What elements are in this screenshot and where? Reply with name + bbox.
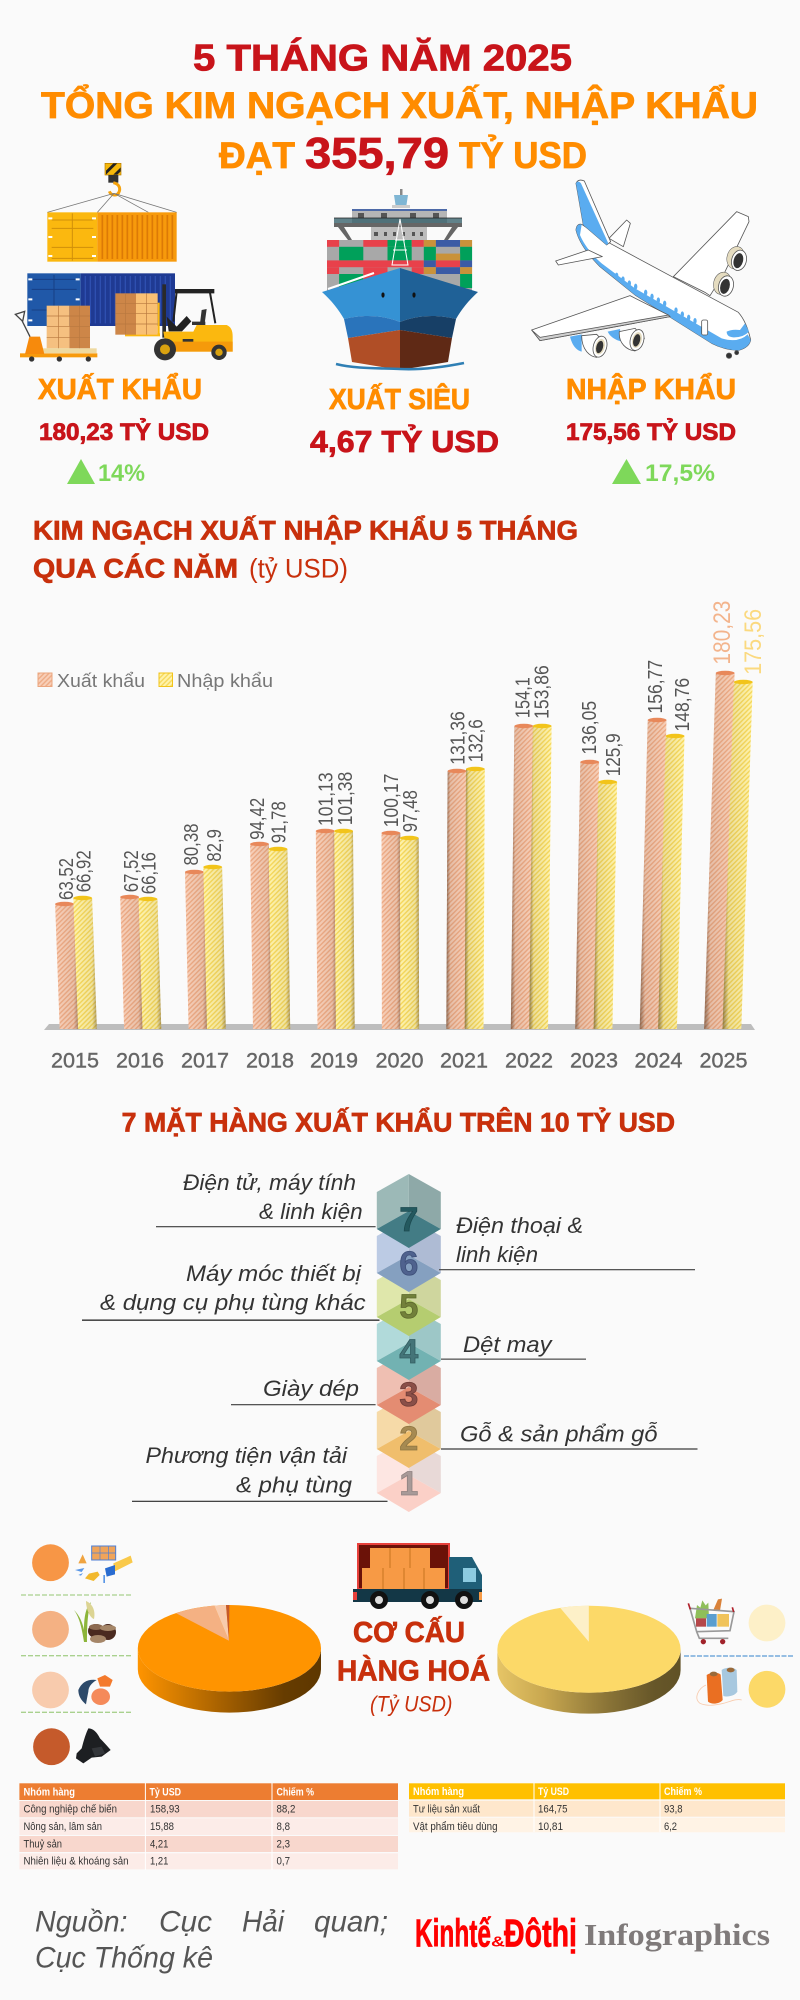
icon: crane, containers and forklift xyxy=(15,163,233,362)
hexagon 7 xyxy=(377,1174,441,1248)
bars 2016: 67,52 xyxy=(121,850,143,892)
bars 2021 xyxy=(440,711,488,1072)
chart legend xyxy=(38,671,273,691)
label: phương tiện: Phương tiện vận tải xyxy=(146,1443,348,1468)
table: export: 88,2 xyxy=(276,1804,295,1816)
bars 2016: 66,16 xyxy=(139,852,161,894)
hexagon stack xyxy=(377,1174,441,1512)
bars 2022: 2022 xyxy=(505,1048,553,1072)
bars 2021: 131,36 xyxy=(447,711,469,765)
bars 2021: 2021 xyxy=(440,1048,488,1072)
stat: xuất khẩu: 14% xyxy=(98,460,145,487)
stat: nhập khẩu xyxy=(566,372,736,487)
bars 2018 xyxy=(246,798,294,1072)
bars 2020: 97,48 xyxy=(400,790,422,832)
bars 2020: 2020 xyxy=(376,1048,424,1072)
heading: goods structure: HÀNG HOÁ xyxy=(337,1654,490,1688)
source note: Cục xyxy=(159,1906,212,1939)
stat: xuất siêu: XUẤT SIÊU xyxy=(329,382,470,416)
bars 2016: 2016 xyxy=(116,1048,164,1072)
label: dệt may: Dệt may xyxy=(463,1332,554,1357)
bars 2022 xyxy=(505,665,554,1072)
bars 2024: 2024 xyxy=(634,1048,683,1072)
table: export: Chiếm % xyxy=(276,1786,314,1798)
stat: nhập khẩu: 17,5% xyxy=(645,460,715,487)
hexagon 2: 2 xyxy=(399,1420,418,1458)
logo: Infographics xyxy=(584,1917,770,1952)
title: ĐẠT xyxy=(219,135,295,176)
bars 2015: 63,52 xyxy=(56,858,78,900)
table: import: Vật phẩm tiêu dùng xyxy=(413,1821,498,1833)
stat: xuất siêu xyxy=(310,382,499,459)
stat: nhập khẩu: 175,56 TỶ USD xyxy=(566,417,736,446)
label: phương tiện: & phụ tùng xyxy=(236,1473,353,1498)
logo xyxy=(415,1913,770,1956)
bars 2017 xyxy=(181,824,229,1072)
table: import xyxy=(409,1783,785,1833)
table: export: Nông sản, lâm sản xyxy=(24,1821,102,1833)
label: gỗ: Gỗ & sản phẩm gỗ xyxy=(460,1422,658,1447)
table: import: Tỷ USD xyxy=(538,1786,569,1798)
chart legend: Xuất khẩu xyxy=(57,671,145,691)
title: TỶ USD xyxy=(459,135,587,176)
label: điện tử: & linh kiện xyxy=(259,1199,363,1224)
bars 2022: 153,86 xyxy=(532,665,554,719)
bars 2025: 180,23 xyxy=(709,601,736,665)
bars 2020: 100,17 xyxy=(381,774,403,827)
table: export: Thuỷ sản xyxy=(24,1838,62,1850)
pie chart: export xyxy=(138,1605,321,1713)
bars 2019 xyxy=(310,772,358,1072)
bars 2015: 66,92 xyxy=(73,850,95,892)
stat: xuất siêu: 4,67 TỶ USD xyxy=(310,424,499,459)
label: máy móc xyxy=(82,1261,380,1321)
icon: agriculture and forestry xyxy=(74,1601,116,1643)
hexagon 7: 7 xyxy=(399,1201,418,1239)
table: export: 8,8 xyxy=(276,1821,290,1833)
bars 2023 xyxy=(570,701,625,1072)
bars 2024 xyxy=(634,660,694,1072)
icon: container ship xyxy=(322,189,478,370)
bars 2019: 2019 xyxy=(310,1048,358,1072)
table: export: Tỷ USD xyxy=(150,1786,181,1798)
table: export: Nhóm hàng xyxy=(24,1786,75,1798)
label: điện thoại: linh kiện xyxy=(456,1242,538,1267)
source note: Nguồn: xyxy=(35,1906,128,1939)
title: TỔNG KIM NGẠCH XUẤT, NHẬP KHẨU xyxy=(41,83,758,126)
bars 2021: 132,6 xyxy=(466,719,488,762)
label: phương tiện xyxy=(132,1443,388,1502)
heading: goods structure: (Tỷ USD) xyxy=(370,1692,452,1717)
stat: xuất khẩu xyxy=(38,372,209,487)
source note: quan; xyxy=(314,1906,388,1939)
icon: delivery truck xyxy=(353,1544,482,1609)
bars 2025: 2025 xyxy=(700,1048,748,1072)
hexagon 3: 3 xyxy=(399,1376,418,1414)
label: điện tử xyxy=(156,1170,376,1227)
bars 2016 xyxy=(116,850,164,1072)
hexagon 1: 1 xyxy=(399,1465,418,1503)
bars 2019: 101,38 xyxy=(335,772,357,825)
heading: seven export items: 7 MẶT HÀNG XUẤT KHẨU TRÊN 10 TỶ USD xyxy=(122,1108,675,1138)
logo: & xyxy=(491,1934,505,1951)
bars 2019: 101,13 xyxy=(316,772,338,826)
table: import: 164,75 xyxy=(538,1804,568,1816)
title: 5 THÁNG NĂM 2025 xyxy=(193,38,572,79)
stat: xuất khẩu: XUẤT KHẨU xyxy=(38,372,202,406)
bars 2015 xyxy=(51,850,99,1072)
bars 2018: 94,42 xyxy=(247,798,269,840)
chart legend: Nhập khẩu xyxy=(177,671,273,691)
icon: thread spools xyxy=(697,1668,742,1705)
hexagon 3 xyxy=(377,1350,441,1424)
hexagon 5: 5 xyxy=(399,1288,418,1326)
icon: industry xyxy=(75,1546,133,1583)
icon: seafood xyxy=(78,1675,113,1705)
bars 2018: 91,78 xyxy=(269,801,291,843)
pie chart: import xyxy=(497,1606,681,1714)
label: điện thoại xyxy=(439,1213,695,1270)
bars 2015: 2015 xyxy=(51,1048,99,1072)
icon: airplane xyxy=(532,180,751,359)
heading: chart xyxy=(33,514,578,584)
table: import: Chiếm % xyxy=(664,1786,702,1798)
table: export: 4,21 xyxy=(150,1838,168,1850)
hexagon 6: 6 xyxy=(399,1245,418,1283)
label: điện tử: Điện tử, máy tính xyxy=(183,1170,356,1195)
table: import: 10,81 xyxy=(538,1821,563,1833)
table: export: 15,88 xyxy=(150,1821,174,1833)
hexagon 6 xyxy=(377,1218,441,1292)
hexagon 2 xyxy=(377,1394,441,1468)
table: export: 1,21 xyxy=(150,1856,168,1868)
table: export: 2,3 xyxy=(276,1838,290,1850)
bar chart xyxy=(44,601,767,1072)
label: máy móc: & dụng cụ phụ tùng khác xyxy=(100,1290,366,1315)
heading: chart: KIM NGẠCH XUẤT NHẬP KHẨU 5 THÁNG xyxy=(33,514,578,545)
legend: import groups xyxy=(684,1599,794,1708)
bars 2017: 2017 xyxy=(181,1048,229,1072)
icon: shopping cart xyxy=(688,1599,734,1644)
heading: goods structure: CƠ CẤU xyxy=(353,1615,465,1649)
bars 2018: 2018 xyxy=(246,1048,294,1072)
table: export: 0,7 xyxy=(276,1856,290,1868)
bars 2025 xyxy=(700,601,767,1072)
bars 2017: 80,38 xyxy=(181,824,203,866)
legend: export groups xyxy=(21,1544,133,1765)
bars 2024: 156,77 xyxy=(645,660,667,714)
hexagon 4: 4 xyxy=(399,1333,418,1371)
source note xyxy=(35,1906,388,1975)
bars 2024: 148,76 xyxy=(672,678,694,732)
table: import: 93,8 xyxy=(664,1804,682,1816)
table: export xyxy=(19,1783,398,1870)
heading: chart: QUA CÁC NĂM xyxy=(33,553,238,584)
label: giày dép: Giày dép xyxy=(263,1376,359,1401)
bars 2023: 136,05 xyxy=(579,701,601,754)
title: 355,79 xyxy=(305,129,449,178)
heading: goods structure xyxy=(337,1615,490,1717)
table: import: Nhóm hàng xyxy=(413,1786,464,1798)
stat: xuất khẩu: 180,23 TỶ USD xyxy=(39,417,209,446)
table: import: Tư liệu sản xuất xyxy=(413,1804,480,1816)
icon: coal xyxy=(76,1728,111,1763)
label: máy móc: Máy móc thiết bị xyxy=(186,1261,362,1286)
bars 2023: 2023 xyxy=(570,1048,618,1072)
source note: Cục Thống kê xyxy=(35,1942,213,1975)
label: điện thoại: Điện thoại & xyxy=(456,1213,583,1238)
heading: chart: (tỷ USD) xyxy=(249,554,348,584)
table: export: Công nghiệp chế biến xyxy=(24,1804,117,1816)
bars 2020 xyxy=(376,774,424,1072)
bars 2017: 82,9 xyxy=(204,829,226,862)
table: export: Nhiên liệu & khoáng sản xyxy=(24,1856,128,1868)
hexagon 4 xyxy=(377,1306,441,1380)
hexagon 1 xyxy=(377,1438,441,1512)
bars 2022: 154,1 xyxy=(513,677,535,718)
source note: Hải xyxy=(242,1906,285,1939)
bars 2023: 125,9 xyxy=(603,733,625,776)
logo: Đôthị xyxy=(504,1913,577,1956)
title xyxy=(41,38,758,178)
table: export: 158,93 xyxy=(150,1804,180,1816)
bars 2025: 175,56 xyxy=(740,609,767,675)
hexagon 5 xyxy=(377,1262,441,1336)
stat: nhập khẩu: NHẬP KHẨU xyxy=(566,372,736,406)
logo: Kinhtế xyxy=(415,1913,491,1956)
table: import: 6,2 xyxy=(664,1821,677,1833)
